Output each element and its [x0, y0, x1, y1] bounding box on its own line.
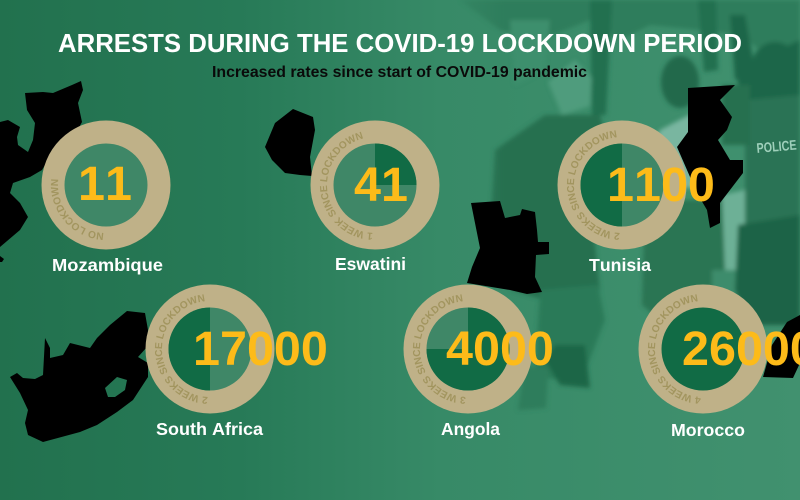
- donut: Morocco: [638, 284, 800, 440]
- background photo: police and civilians: [460, 0, 800, 410]
- donut: Eswatini: 1 WEEK SINCE LOCKDOWN: [320, 132, 372, 240]
- donut: Eswatini: 41: [354, 158, 408, 212]
- donut: South Africa: 2 WEEKS SINCE LOCKDOWN: [155, 294, 208, 404]
- donut: Angola: 3 WEEKS SINCE LOCKDOWN: [413, 294, 466, 404]
- donut: Tunisia: 1100: [607, 158, 715, 212]
- donut: Mozambique: NO LOCKDOWN: [50, 179, 104, 240]
- donut: Mozambique: [42, 120, 170, 275]
- donut: Tunisia: [558, 120, 715, 275]
- subtitle: Increased rates since start of COVID-19 pandemic: [212, 64, 587, 81]
- map: Mozambique: [0, 81, 83, 262]
- map: Angola: [467, 201, 549, 294]
- donut: Eswatini: [310, 120, 440, 274]
- map: Tunisia: [677, 85, 743, 228]
- donut: Eswatini: Eswatini: [335, 254, 406, 274]
- donut: Angola: [404, 284, 554, 439]
- donut: Angola: Angola: [441, 419, 500, 439]
- donut: South Africa: South Africa: [156, 419, 263, 439]
- donut: Morocco: 4 WEEKS SINCE LOCKDOWN: [648, 294, 701, 404]
- donut: Mozambique: 11: [78, 157, 132, 211]
- donut: South Africa: [146, 284, 328, 439]
- donut: Tunisia: 2 WEEKS SINCE LOCKDOWN: [567, 130, 620, 240]
- donut: Mozambique: Mozambique: [52, 255, 163, 275]
- map: South Africa: [10, 311, 148, 442]
- title: ARRESTS DURING THE COVID-19 LOCKDOWN PERIOD: [58, 28, 742, 58]
- donut: Morocco: Morocco: [671, 420, 745, 440]
- map: Morocco: [763, 315, 800, 378]
- donut: Angola: 4000: [446, 322, 554, 376]
- donut: Tunisia: Tunisia: [589, 255, 651, 275]
- map: Eswatini: [265, 109, 315, 176]
- donut: South Africa: 17000: [193, 322, 328, 376]
